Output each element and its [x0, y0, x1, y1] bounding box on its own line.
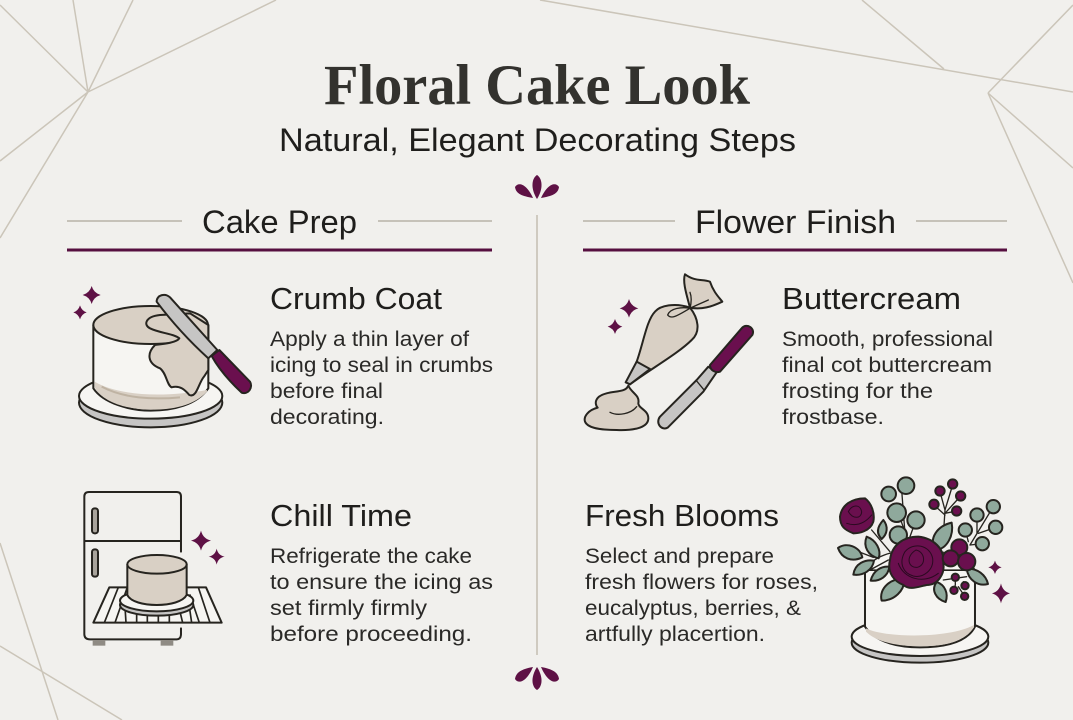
panel: cake prep: [67, 204, 493, 646]
step text: crumb coat: [270, 281, 493, 429]
step text: crumb coat: Crumb Coat: [270, 281, 442, 316]
step text: crumb coat: before final: [270, 379, 383, 403]
step text: fresh blooms: artfully placertion.: [585, 622, 765, 646]
heading: cake prep: [67, 204, 492, 252]
title: Floral Cake Look: [324, 54, 750, 117]
icon: crumb coat cake: [73, 286, 251, 427]
ornament: top: [515, 175, 559, 199]
step text: buttercream: final cot buttercream: [782, 353, 992, 377]
step text: crumb coat: decorating.: [270, 405, 384, 429]
step text: chill time: Refrigerate the cake: [270, 544, 472, 568]
step text: fresh blooms: eucalyptus, berries, &: [585, 596, 801, 620]
step text: crumb coat: Apply a thin layer of: [270, 327, 469, 351]
heading: flower finish: [583, 204, 1007, 252]
step text: crumb coat: icing to seal in crumbs: [270, 353, 493, 377]
subtitle: Natural, Elegant Decorating Steps: [279, 122, 796, 158]
icon: fridge with cake: [84, 492, 225, 646]
step text: fresh blooms: Fresh Blooms: [585, 498, 779, 533]
heading: cake prep: Cake Prep: [202, 204, 357, 240]
heading: flower finish: Flower Finish: [695, 204, 896, 240]
step text: fresh blooms: [585, 498, 818, 646]
icon: piping bag and spatula: [585, 274, 753, 430]
step text: chill time: [270, 498, 493, 646]
step text: chill time: before proceeding.: [270, 622, 472, 646]
step text: buttercream: Buttercream: [782, 281, 961, 316]
step text: buttercream: frostbase.: [782, 405, 884, 429]
ornament: bottom: [515, 667, 559, 690]
step text: chill time: to ensure the icing as: [270, 570, 493, 594]
step text: buttercream: frosting for the: [782, 379, 933, 403]
panel: flower finish: [583, 204, 1010, 663]
step text: buttercream: [782, 281, 993, 429]
step text: buttercream: Smooth, professional: [782, 327, 993, 351]
step text: fresh blooms: fresh flowers for roses,: [585, 570, 818, 594]
step text: fresh blooms: Select and prepare: [585, 544, 774, 568]
icon: floral cake: [838, 477, 1010, 663]
step text: chill time: set firmly firmly: [270, 596, 427, 620]
step text: chill time: Chill Time: [270, 498, 412, 533]
